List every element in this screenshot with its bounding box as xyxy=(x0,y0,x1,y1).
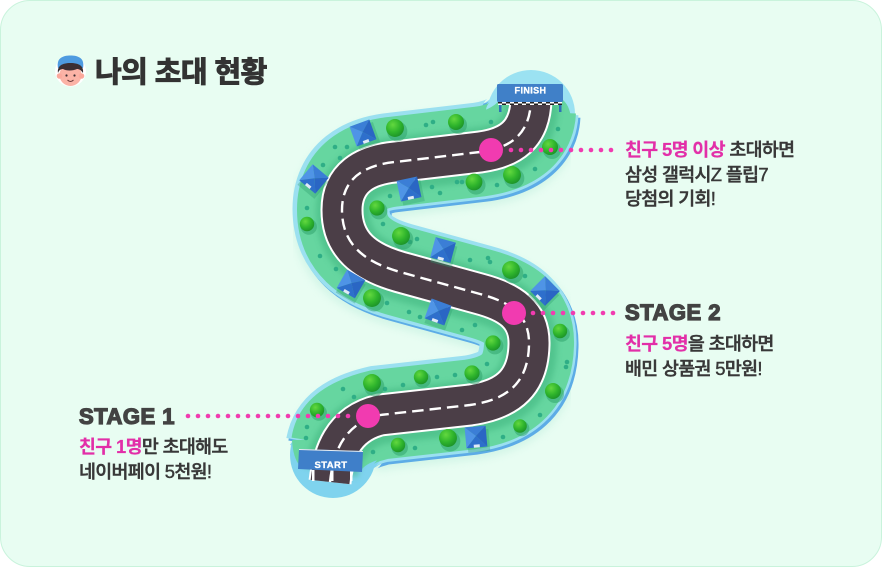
houses xyxy=(296,119,562,453)
title: 나의 초대 현황 xyxy=(95,57,267,89)
small shrubs xyxy=(304,120,569,454)
text block: stage 2: 배민 상품권 5만원! xyxy=(625,358,762,378)
island base: blue shore xyxy=(290,70,575,498)
text block: final stage: 친구 5명 이상 초대하면 xyxy=(625,139,794,160)
island base: green grass xyxy=(292,100,571,472)
marker: stage 1 xyxy=(356,404,380,428)
marker: stage 2 xyxy=(502,301,526,325)
text block: final stage: 삼성 갤럭시Z 플립7 xyxy=(625,164,768,184)
marker: final stage xyxy=(479,138,503,162)
ground shadow xyxy=(333,117,531,461)
text block: stage 1 xyxy=(79,436,228,482)
text block: final stage: 당첨의 기회! xyxy=(625,188,715,209)
start gate xyxy=(298,449,363,481)
heading: stage 1: STAGE 1 xyxy=(79,404,175,429)
connector dots: stage 1 xyxy=(186,414,350,418)
heading: stage 2: STAGE 2 xyxy=(625,300,721,325)
finish gate xyxy=(497,84,563,112)
text block: stage 1: 친구 1명만 초대해도 xyxy=(79,436,228,457)
connector dots: final stage xyxy=(509,148,613,152)
text block: stage 2: 친구 5명을 초대하면 xyxy=(625,333,774,354)
start gate: START xyxy=(315,460,347,471)
text block: stage 2 xyxy=(625,333,774,378)
winding road xyxy=(330,100,531,482)
connector dots: stage 2 xyxy=(531,311,615,315)
trees xyxy=(300,114,570,456)
text block: stage 1: 네이버페이 5천원! xyxy=(79,460,211,482)
icon: boy face xyxy=(55,56,86,86)
text block: final stage xyxy=(625,139,794,209)
finish gate: FINISH xyxy=(515,86,546,96)
